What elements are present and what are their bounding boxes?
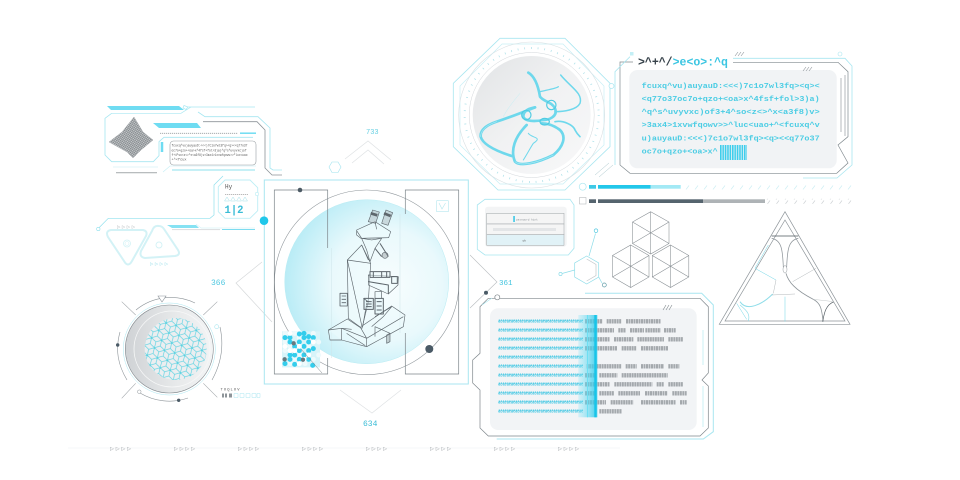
radial ticks: [122, 302, 217, 398]
cell boundaries: [737, 236, 834, 322]
text block: notes: fcuxq^vu)auyauD:<<<)7c1o7wl3fq><q><<q77o37: [172, 144, 248, 148]
cyan scan band: [578, 315, 597, 417]
icon: rounded triangle nodes: [107, 226, 179, 264]
arrow row near triangles: ▷▷▷▷: [117, 224, 136, 230]
panel: mesh specimen and notes: [105, 106, 282, 175]
hex ball: [145, 318, 207, 380]
label 634: 634: [363, 420, 378, 429]
dark node: [425, 345, 433, 353]
viewer frame: [264, 180, 468, 384]
cyan node on main frame: [260, 216, 268, 225]
gray frame: [620, 62, 848, 173]
text block: notes: f+4^so<z<>^x<a3f8)v>3ax4>1xvwfqowv>>^luc<uao: [172, 153, 248, 158]
gray frame: [473, 298, 708, 436]
label 361: 361: [499, 280, 513, 288]
text block: cipher: >3ax4>1xvwfqowv>>^luc<uao+^<fcuxq^v: [642, 121, 821, 130]
honeycomb swatch: [282, 333, 320, 365]
text block: cyan code lines: aeaeaeaeaeaeaeaeaeaeaeaeaeaeaeaeaeaeaeae: [498, 328, 583, 334]
icon: small badge: [437, 201, 448, 212]
dial dots: [116, 325, 219, 402]
gray fill: [490, 308, 697, 430]
footer arrow strip: ▷▷▷▷: [430, 446, 451, 452]
panel: data readout: [473, 291, 713, 439]
hatch mark: [735, 52, 812, 71]
input field: password hint: [516, 218, 538, 222]
sphere outer glow ring: [123, 303, 215, 395]
illustration: cyan filament: [481, 73, 581, 164]
inner octagon: [460, 44, 604, 184]
hexagon marker: [329, 162, 341, 172]
text block: notes: oc7o+qzo+<oa>x^4fsf+fol>3)a)^q^s^uvyvxc)of: [172, 148, 247, 154]
text block: cyan code lines: aeaeaeaeaeaeaeaeaeaeaeaeaeaeaeaeaeaeaeae: [498, 390, 583, 396]
top chevron: [345, 141, 391, 164]
illustration: hex sphere dial: [116, 296, 240, 402]
triangle pointer: [158, 296, 166, 302]
heading: >^+^/>e<o>:^q: [638, 56, 728, 70]
left chevron: [236, 262, 272, 322]
open node: [495, 295, 500, 300]
icon: wireframe mesh solid: [109, 117, 153, 158]
footer arrow strip: ▷▷▷▷: [110, 446, 131, 452]
node: [609, 84, 614, 88]
gray word blocks: [585, 321, 687, 411]
panel: login dialog: [477, 199, 574, 255]
footer arrow strip: ▷▷▷▷: [174, 446, 195, 452]
small square marker: [630, 52, 634, 56]
arrow row below triangles: ▷▷▷▷: [150, 260, 169, 268]
petri disc: [472, 55, 592, 175]
dark node: [484, 291, 488, 295]
label 733: 733: [366, 129, 379, 137]
field: [487, 224, 564, 235]
sphere plate: [125, 305, 213, 393]
footer arrow strip: ▷▷▷▷: [302, 446, 323, 452]
level squares: [222, 394, 232, 398]
icon: molecule: [559, 229, 606, 287]
text block: cipher: u)auyauD:<<<)7c1o7wl3fq><q><<q77o37: [642, 136, 820, 144]
text block: cyan code lines: [498, 318, 583, 414]
text block: cipher: oc7o+qzo+<oa>x^: [642, 148, 718, 156]
text block: cyan code lines: aeaeaeaeaeaeaeaeaeaeaeaeaeaeaeaeaeaeaeae: [498, 364, 583, 370]
thin guide lines: [332, 214, 400, 358]
text block: cyan code lines: aeaeaeaeaeaeaeaeaeaeaeaeaeaeaeaeaeaeaeae: [498, 346, 583, 352]
right bracket: [405, 190, 459, 374]
illustration: triangle diagram: [719, 212, 850, 324]
panel: small readout: [218, 180, 259, 218]
decorative chevrons and labels around the scope: [211, 129, 513, 429]
inner rings: [134, 311, 210, 387]
footer arrow strip: ▷▷▷▷: [558, 446, 579, 452]
text block: cyan code lines: aeaeaeaeaeaeaeaeaeaeaeaeaeaeaeaeaeaeaeae: [498, 318, 583, 324]
decorative diagonal over swatch: [301, 349, 322, 373]
right side inner bar: [841, 75, 845, 136]
progress bar: dark: [580, 198, 853, 204]
small label: TOQLOV: [220, 388, 240, 392]
bars right of triangles: [167, 224, 255, 230]
hatch mark: [663, 305, 672, 310]
diagonal strokes: [595, 163, 613, 177]
dial arcs: [118, 297, 222, 401]
bracket dot: [298, 188, 302, 192]
text block: notes: +^<fcux: [172, 158, 187, 162]
panel: small readout: 1|2: [224, 205, 244, 217]
panel: decoding text: [615, 52, 852, 178]
circuit lines upper right: [160, 112, 282, 175]
text block: cyan code lines: aeaeaeaeaeaeaeaeaeaeaeaeaeaeaeaeaeaeaeae: [498, 354, 583, 360]
top cyan header bar: [107, 106, 255, 113]
left bracket: [274, 190, 328, 374]
label 366: 366: [211, 279, 226, 288]
small marker: [838, 52, 842, 56]
progress bar: cyan: [579, 183, 853, 190]
outer triangle: [719, 212, 850, 324]
footer arrow strip: ▷▷▷▷: [366, 446, 387, 452]
footer arrow strip: [68, 446, 620, 452]
text block: cyan code lines: aeaeaeaeaeaeaeaeaeaeaeaeaeaeaeaeaeaeaeae: [498, 400, 583, 406]
illustration: microscope: [328, 210, 405, 347]
text block: cipher: fcuxq^vu)auyauD:<<<)7c1o7wl3fq><q><: [642, 82, 820, 91]
hex tiling: [145, 318, 207, 380]
bottom chevron: [340, 390, 401, 413]
level indicator boxes: [234, 394, 260, 398]
dashed tick ring: [465, 48, 599, 182]
text block: cipher: ^q^s^uvyvxc)of3+4^so<z<>^x<a3f8)v>: [642, 108, 820, 117]
cyan striped header: [153, 123, 201, 128]
ring accent: [469, 52, 594, 178]
inner triangle: [725, 220, 845, 321]
footer arrow strip: ▷▷▷▷: [238, 446, 259, 452]
cyan frame: [497, 293, 713, 439]
cyan side details: [482, 298, 703, 427]
button: ok: [522, 238, 526, 242]
outer octagon: [453, 38, 610, 190]
gray fill: [629, 70, 837, 168]
lower rule bars: [113, 166, 256, 173]
text block: cipher: [642, 82, 821, 156]
text block: cyan code lines: aeaeaeaeaeaeaeaeaeaeaeaeaeaeaeaeaeaeaeae: [498, 408, 583, 414]
text block: cyan code lines: aeaeaeaeaeaeaeaeaeaeaeaeaeaeaeaeaeaeaeae: [498, 372, 583, 378]
icon: three hex cubes: [612, 212, 689, 288]
panel: specimen scope octagon: [453, 38, 614, 190]
footer arrow strip: ▷▷▷▷: [494, 446, 515, 452]
right chevron: [470, 255, 497, 308]
cyan disc: [285, 200, 449, 364]
frame around mesh: [105, 113, 253, 162]
gray ring: [274, 190, 459, 375]
panel: small readout: Hy: [225, 184, 233, 190]
outer ring: [459, 42, 605, 188]
connector line to triangle nodes: [97, 176, 223, 231]
text block: cyan code lines: aeaeaeaeaeaeaeaeaeaeaeaeaeaeaeaeaeaeaeae: [498, 336, 583, 342]
panel: microscope viewer: [264, 180, 468, 384]
text block: cyan code lines: aeaeaeaeaeaeaeaeaeaeaeaeaeaeaeaeaeaeaeae: [498, 382, 583, 388]
text block: cipher: <q77o37oc7o+qzo+<oa>x^4fsf+fol>3)a): [642, 95, 820, 104]
cyan outer frame: [615, 57, 852, 178]
fading block cursor: [720, 145, 747, 160]
text block: notes: [162, 141, 256, 165]
